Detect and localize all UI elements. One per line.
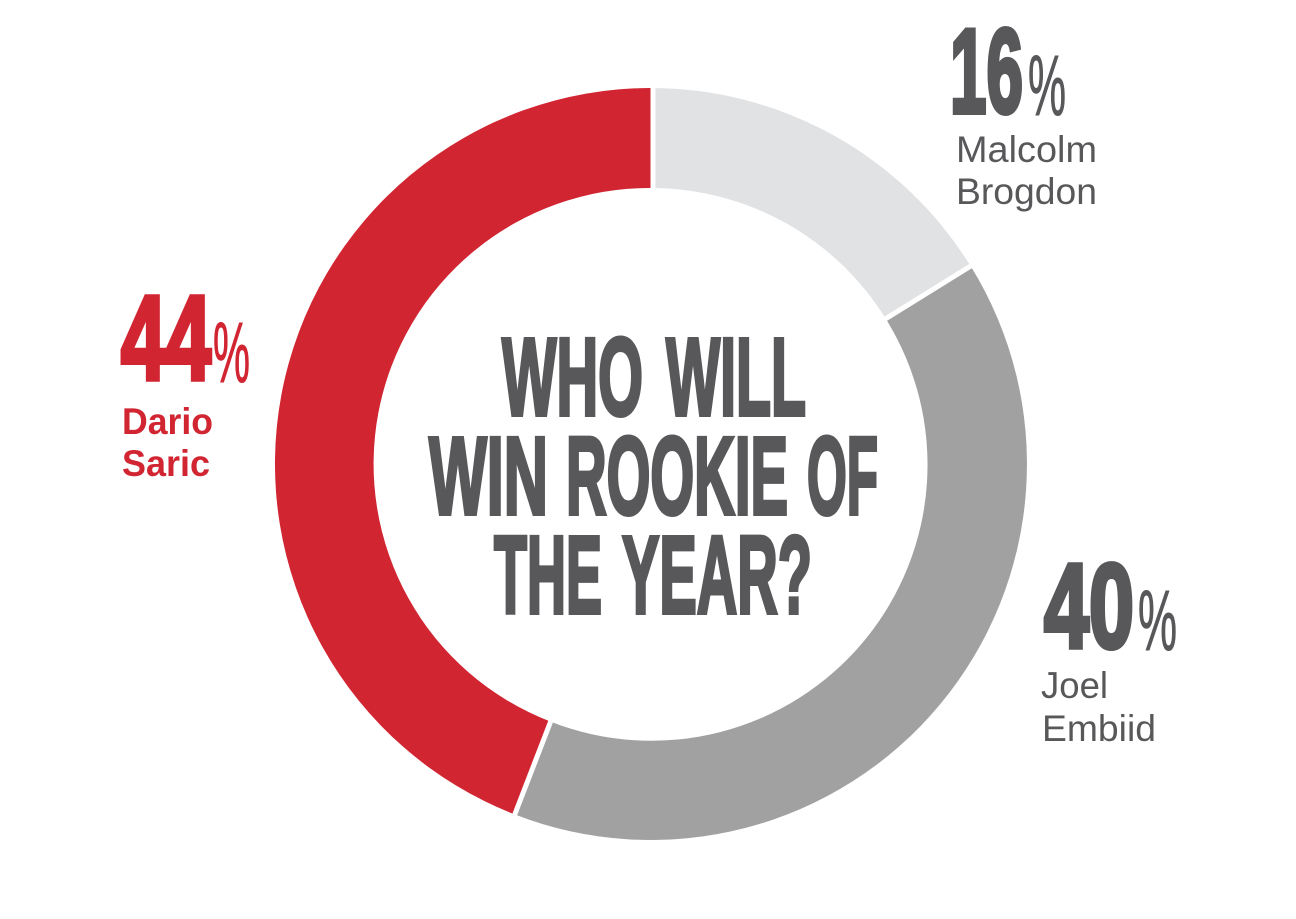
title: WIN <box>429 415 548 538</box>
title: ROOKIE <box>566 415 788 538</box>
donut chart <box>275 84 1027 840</box>
label: Joel Embiid 40%: % <box>1138 574 1177 669</box>
title: THE <box>494 514 602 637</box>
label: Joel Embiid 40% <box>1041 540 1177 749</box>
label: Dario Saric 44%: Dario <box>122 401 213 442</box>
title: YEAR? <box>622 514 812 637</box>
label: Malcolm Brogdon 16%: Brogdon <box>956 171 1097 212</box>
label: Joel Embiid 40%: 40 <box>1044 540 1134 674</box>
segment: Malcolm Brogdon 16% <box>651 88 971 318</box>
title: WILL <box>666 316 806 439</box>
title <box>429 316 878 637</box>
segment: Joel Embiid 40% <box>515 266 1027 840</box>
text: OF <box>807 415 878 538</box>
label: Malcolm Brogdon 16%: % <box>1028 39 1066 134</box>
label: Dario Saric 44%: Saric <box>122 443 210 484</box>
title: WHO <box>502 316 643 439</box>
label: Dario Saric 44% <box>121 272 250 484</box>
label: Joel Embiid 40%: Embiid <box>1042 708 1156 749</box>
label: Malcolm Brogdon 16%: Malcolm <box>956 129 1097 170</box>
label: Joel Embiid 40%: Joel <box>1041 665 1108 706</box>
label: Dario Saric 44%: 44 <box>121 272 211 406</box>
segment: Dario Saric 44% <box>275 88 651 814</box>
label: Malcolm Brogdon 16% <box>950 4 1097 212</box>
text: % <box>213 306 250 401</box>
label: Malcolm Brogdon 16%: 16 <box>950 4 1023 138</box>
